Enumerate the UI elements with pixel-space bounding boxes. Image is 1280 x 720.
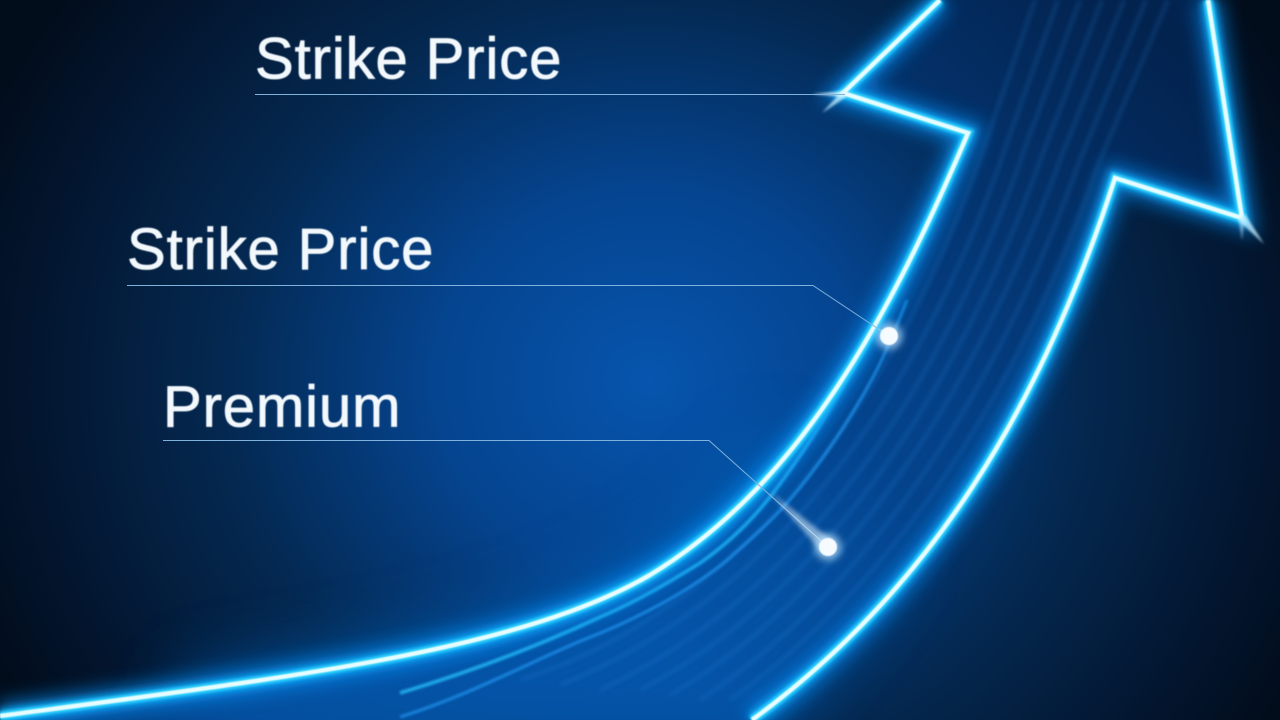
tip flare: right head bbox=[1238, 214, 1264, 244]
marker: premium dot bbox=[770, 492, 841, 560]
blue glow under the curve bbox=[180, 430, 900, 720]
label: strike price middle: Strike Price bbox=[127, 217, 434, 282]
arrow streaks bbox=[520, 0, 1168, 700]
label: premium bbox=[163, 374, 828, 547]
arrow outline: right edge bbox=[752, 0, 1242, 720]
tip flare: left head bbox=[812, 90, 846, 113]
inner bright streaks bbox=[400, 270, 907, 717]
label: premium: Premium bbox=[163, 374, 401, 440]
label: strike price middle bbox=[127, 217, 889, 336]
label: strike price top: Strike Price bbox=[255, 26, 562, 92]
marker: strike price dot bbox=[876, 323, 902, 349]
